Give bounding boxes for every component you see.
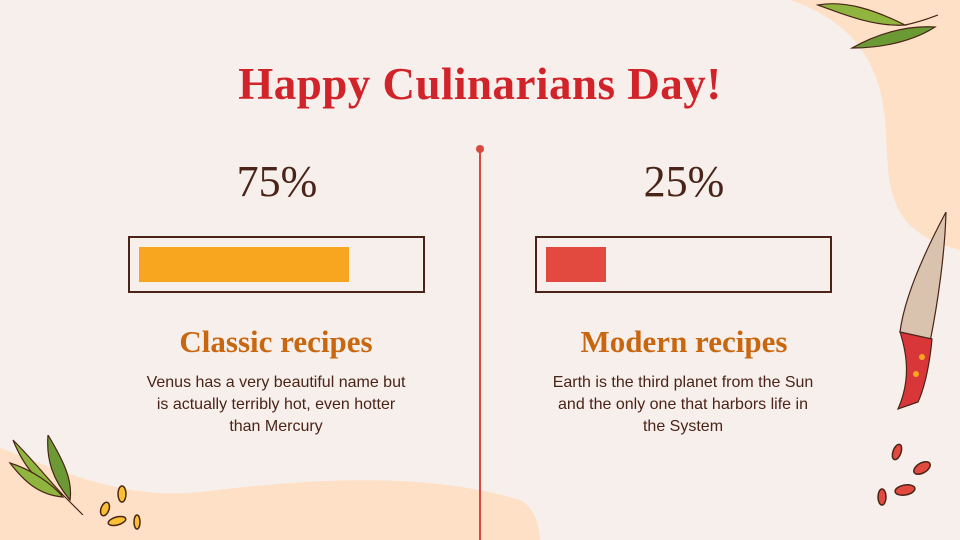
icon: leaves bottom left xyxy=(8,435,84,515)
left heading: Classic recipes xyxy=(179,324,373,359)
right progress bar xyxy=(535,236,832,293)
center divider xyxy=(476,145,484,540)
left text: Venus has a very beautiful name but is actually terribly hot, even hotter than Mercury xyxy=(147,374,405,435)
icon: leaves top right xyxy=(816,3,938,49)
icon: knife xyxy=(896,212,947,410)
right heading: Modern recipes xyxy=(581,324,787,359)
right percentage: 25% xyxy=(644,157,724,206)
left progress bar xyxy=(128,236,425,293)
icon: red beans xyxy=(877,444,931,506)
left percentage: 75% xyxy=(237,157,317,206)
title: Happy Culinarians Day! xyxy=(238,59,722,109)
right text: Earth is the third planet from the Sun and the only one that harbors life in the System xyxy=(553,374,813,435)
icon: yellow grains xyxy=(100,485,141,530)
